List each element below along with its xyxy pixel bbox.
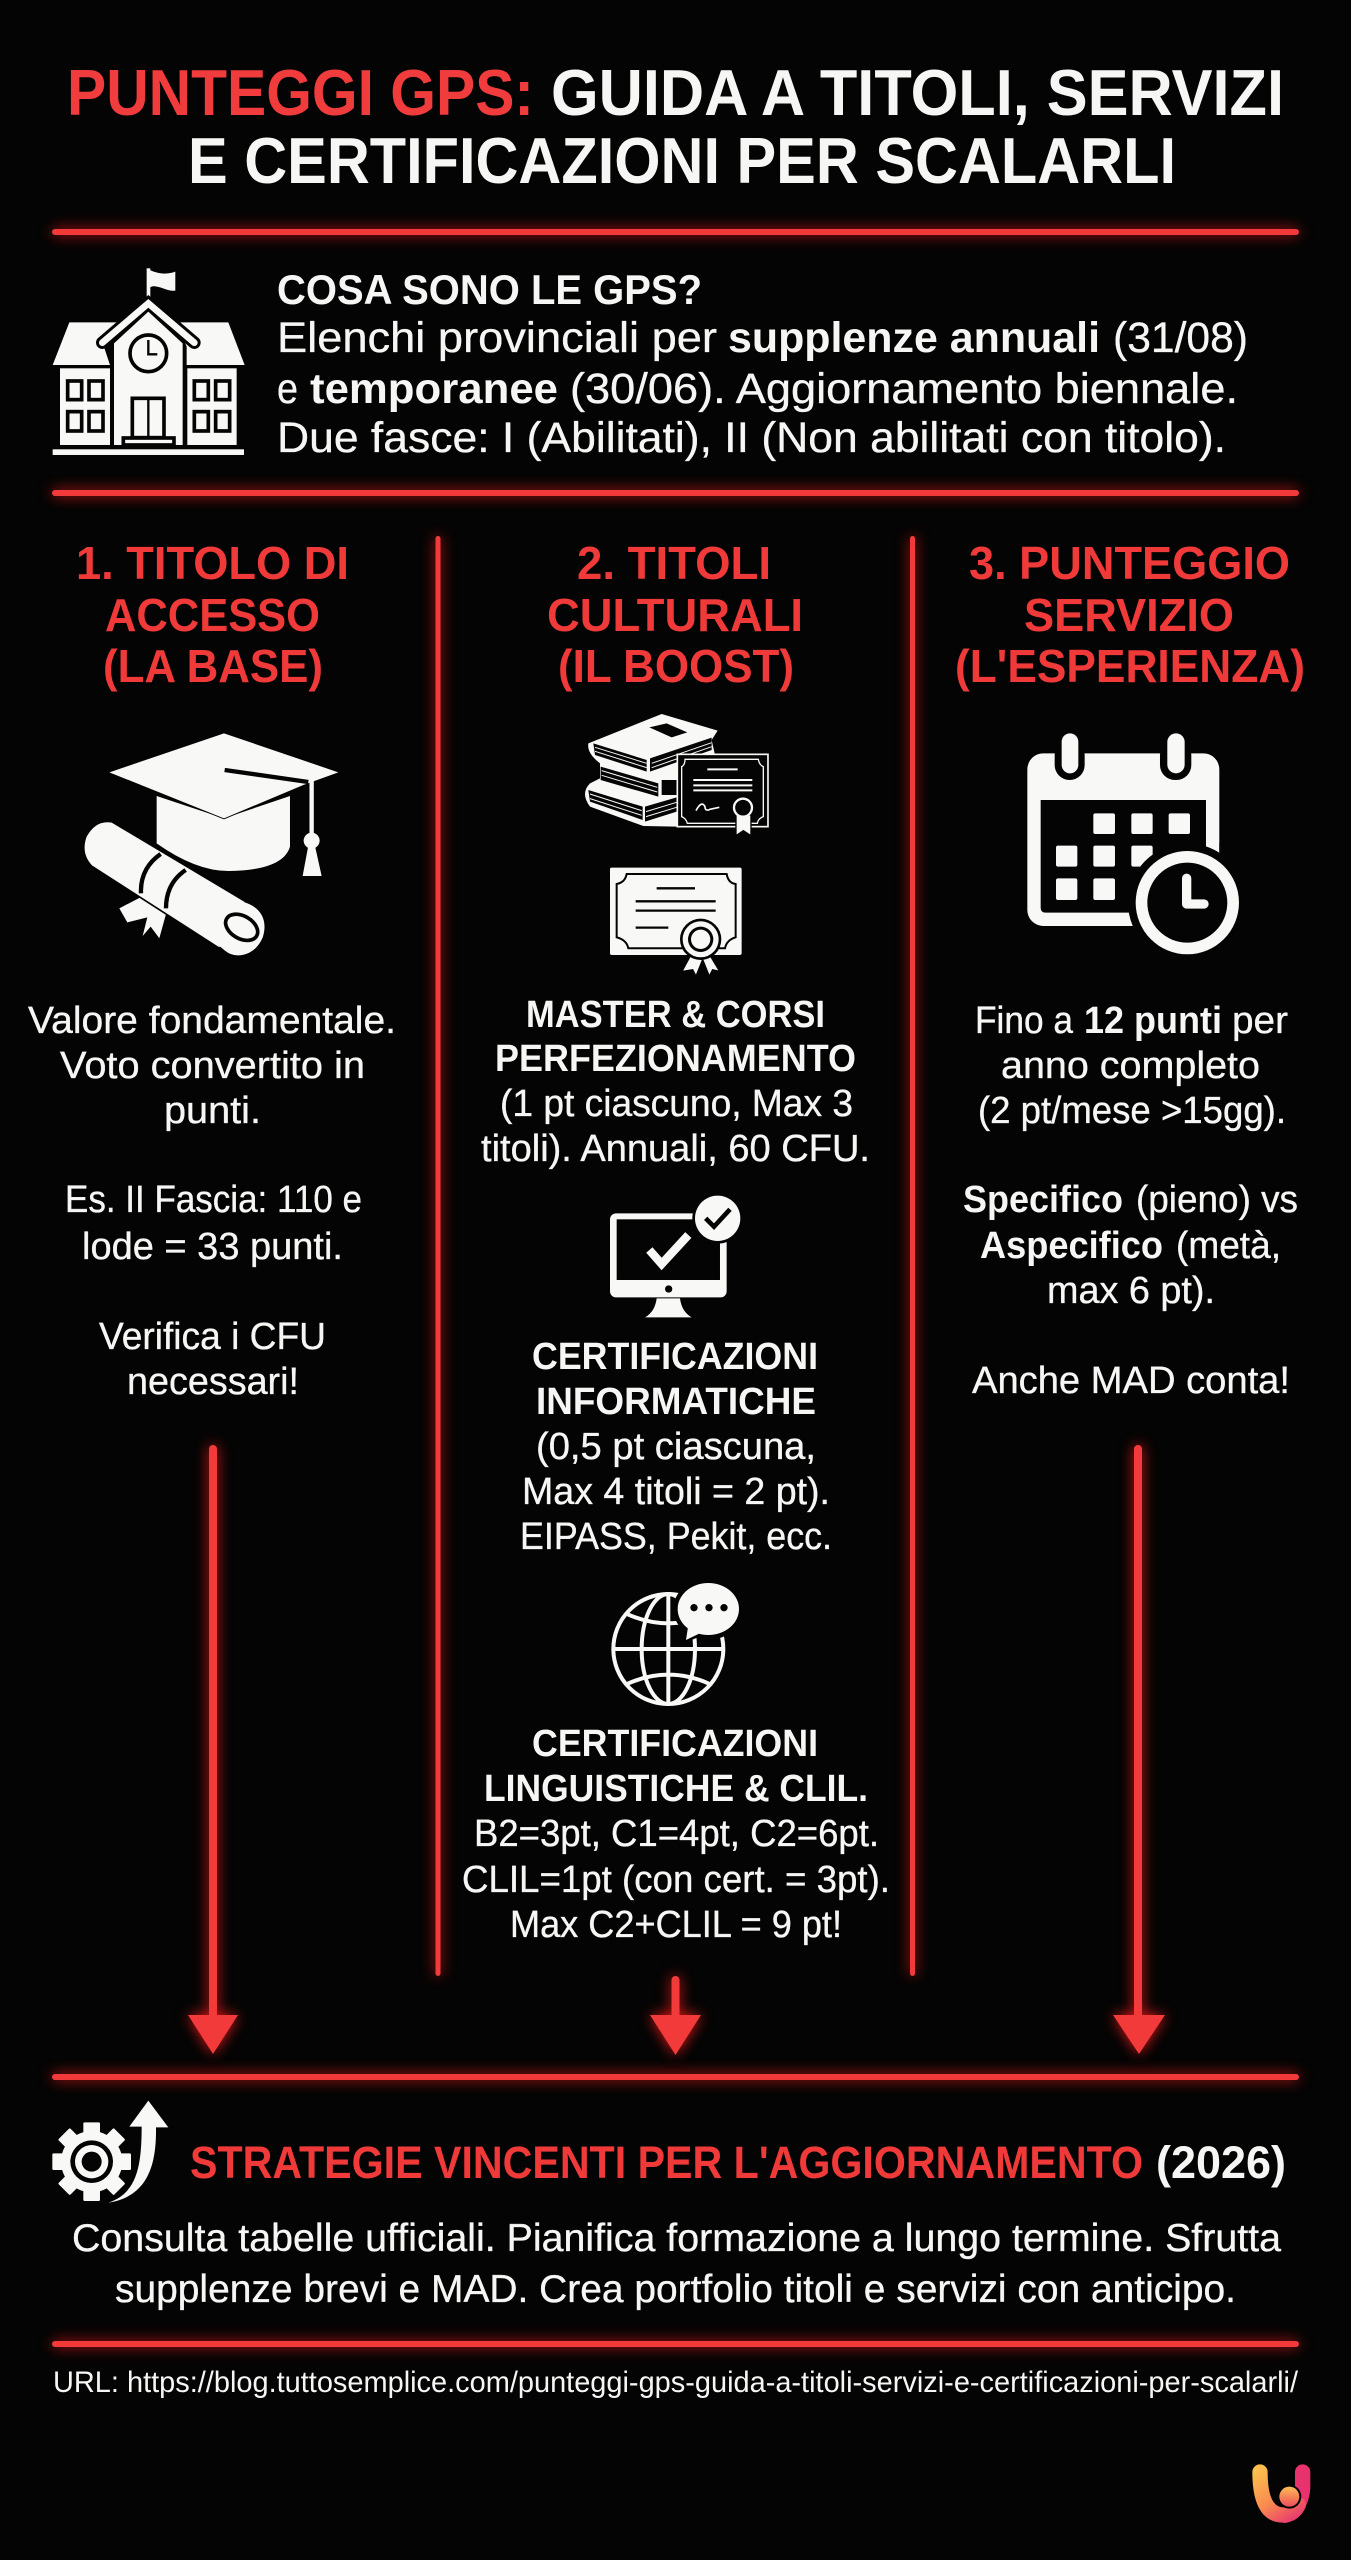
text: certificazioni linguistiche: Max C2+CLIL = 9 pt! [510, 1904, 842, 1946]
text: url: URL: https://blog.tuttosemplice.com/punteggi-gps-guida-a-titoli-servizi-e-certificazioni-per-scalarli/ [53, 2366, 1299, 2399]
text: certificazioni linguistiche: LINGUISTICHE & CLIL. [484, 1768, 868, 1810]
text: valore fondamentale: lode = 33 punti. [82, 1226, 343, 1268]
heading: column 3 [955, 537, 1305, 692]
text: certificazioni informatiche: EIPASS, Pekit, ecc. [520, 1516, 832, 1558]
heading: column 2: 2. TITOLI [577, 537, 771, 589]
text: strategie: supplenze brevi e MAD. Crea portfolio titoli e servizi con anticipo. [115, 2268, 1236, 2311]
panel: punteggio servizio [955, 537, 1305, 1402]
title: PUNTEGGI GPS: [67, 56, 534, 129]
text: fino a 12 punti: Fino a [975, 1000, 1074, 1042]
text: strategie: Consulta tabelle ufficiali. Pianifica formazione a lungo termine. Sfrutta [72, 2217, 1281, 2260]
text: fino a 12 punti: Anche MAD conta! [972, 1360, 1290, 1402]
text: master e corsi [481, 994, 870, 1170]
heading: column 1: 1. TITOLO DI [76, 537, 349, 589]
heading: strategie vincenti: (2026) [1156, 2137, 1286, 2188]
text: valore fondamentale: Es. II Fascia: 110 e [65, 1179, 362, 1221]
heading: strategie vincenti: STRATEGIE VINCENTI PER L'AGGIORNAMENTO [190, 2137, 1143, 2188]
intro text: temporanee [310, 365, 558, 413]
text: certificazioni informatiche [520, 1336, 832, 1558]
text: master e corsi: titoli). Annuali, 60 CFU. [481, 1128, 870, 1170]
heading: column 3: (L'ESPERIENZA) [955, 640, 1305, 692]
text: certificazioni linguistiche: B2=3pt, C1=4pt, C2=6pt. [474, 1813, 879, 1855]
icon: gear with up arrow [52, 2101, 168, 2203]
panel: titolo di accesso [28, 537, 396, 1403]
text: valore fondamentale: Verifica i CFU [99, 1316, 326, 1358]
intro text: e [277, 365, 298, 413]
heading: column 2: (IL BOOST) [558, 640, 794, 692]
intro text: COSA SONO LE GPS? [277, 266, 702, 313]
text: master e corsi: MASTER & CORSI [526, 994, 825, 1036]
intro text: Due fasce: I (Abilitati), II (Non abilitati con titolo). [277, 414, 1226, 462]
title [67, 56, 1284, 197]
intro text: Elenchi provinciali per [277, 314, 717, 362]
heading: column 3: SERVIZIO [1024, 589, 1234, 641]
intro text: (30/06). Aggiornamento biennale. [570, 365, 1238, 413]
panel: titoli culturali [462, 537, 890, 1946]
text: certificazioni informatiche: CERTIFICAZIONI [532, 1336, 818, 1378]
text: fino a 12 punti: 12 punti [1084, 1000, 1222, 1042]
intro text: supplenze annuali [728, 314, 1100, 362]
text: valore fondamentale: Voto convertito in [60, 1045, 365, 1087]
text: fino a 12 punti: max 6 pt). [1047, 1270, 1215, 1312]
divider lines [52, 229, 1299, 2347]
text: valore fondamentale: Valore fondamentale. [28, 1000, 396, 1042]
text: certificazioni linguistiche [462, 1723, 890, 1946]
text: fino a 12 punti: anno completo [1001, 1045, 1260, 1087]
intro text [277, 266, 1248, 462]
arrow: column 1 [188, 1445, 238, 2054]
icon: certificate [610, 868, 742, 977]
arrow: column 3 [1113, 1445, 1165, 2054]
text: certificazioni linguistiche: CERTIFICAZIONI [532, 1723, 818, 1765]
text: fino a 12 punti: (2 pt/mese >15gg). [978, 1090, 1286, 1132]
icon: globe with speech bubble [613, 1578, 743, 1704]
arrow: column 2 [650, 1976, 701, 2055]
heading: column 1 [76, 537, 349, 692]
icon: logo [1260, 2472, 1303, 2515]
text: valore fondamentale: punti. [164, 1090, 261, 1132]
heading: column 2: CULTURALI [547, 589, 803, 641]
heading: column 3: 3. PUNTEGGIO [969, 537, 1290, 589]
title: E CERTIFICAZIONI PER SCALARLI [188, 124, 1176, 197]
icon: school [53, 268, 245, 455]
heading: column 2 [547, 537, 803, 692]
icon: calendar and clock [1027, 733, 1253, 962]
text: certificazioni informatiche: INFORMATICHE [536, 1381, 816, 1423]
text: fino a 12 punti [963, 1000, 1298, 1402]
text: certificazioni linguistiche: CLIL=1pt (con cert. = 3pt). [462, 1859, 890, 1901]
title: GUIDA A TITOLI, SERVIZI [551, 56, 1284, 129]
icon: books and diploma [585, 714, 768, 836]
icon: graduation cap and diploma [85, 733, 338, 955]
text: fino a 12 punti: per [1232, 1000, 1288, 1042]
text: valore fondamentale [28, 1000, 396, 1403]
icon: computer with check [610, 1193, 743, 1317]
heading: column 1: (LA BASE) [103, 640, 323, 692]
text: certificazioni informatiche: Max 4 titoli = 2 pt). [522, 1471, 830, 1513]
text: strategie [72, 2217, 1281, 2311]
text: certificazioni informatiche: (0,5 pt ciascuna, [536, 1426, 816, 1468]
text: fino a 12 punti: Aspecifico [980, 1225, 1163, 1267]
text: fino a 12 punti: Specifico [963, 1179, 1123, 1221]
text: fino a 12 punti: (metà, [1176, 1225, 1281, 1267]
text: fino a 12 punti: (pieno) vs [1136, 1179, 1298, 1221]
text: valore fondamentale: necessari! [127, 1361, 299, 1403]
text: master e corsi: (1 pt ciascuno, Max 3 [500, 1083, 853, 1125]
intro text: (31/08) [1113, 314, 1248, 362]
text: master e corsi: PERFEZIONAMENTO [495, 1038, 856, 1080]
heading: column 1: ACCESSO [105, 589, 320, 641]
